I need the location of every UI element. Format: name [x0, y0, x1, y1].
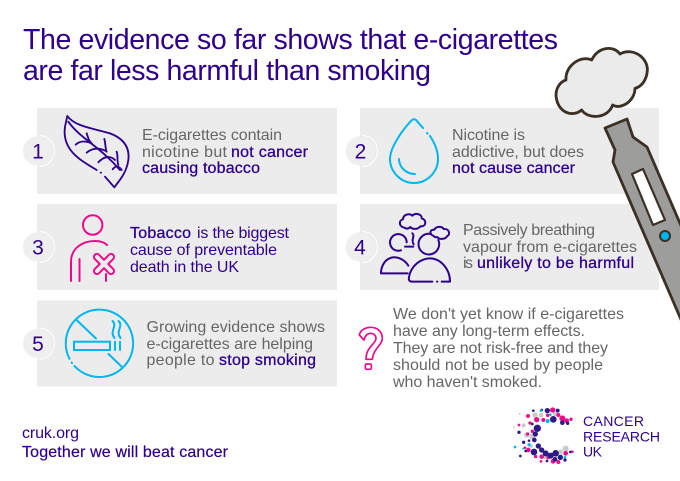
text: panel 5: stop smoking [219, 352, 316, 369]
caveat text: should not be used by people [393, 357, 603, 374]
text: panel 4: vapour from e-cigarettes [463, 239, 637, 256]
logo wordmark [583, 413, 660, 460]
pen window [632, 169, 665, 225]
number badge 1 [23, 136, 54, 166]
text: panel 2 [452, 127, 584, 177]
number badge 1: 1 [32, 140, 44, 164]
text: panel 2: Nicotine is [452, 127, 525, 144]
text: panel 1: nicotine but [142, 144, 228, 161]
icon: people breathing vapour [381, 214, 450, 282]
number badge 2: 2 [355, 140, 366, 164]
number badge 4 [346, 232, 377, 262]
panel 5: stop smoking [23, 300, 337, 386]
panel 2: nicotine [346, 108, 659, 194]
text: panel 2: addictive, but does [452, 144, 584, 161]
text: panel 3: death in the UK [130, 259, 239, 276]
text: panel 3: is the biggest [197, 225, 290, 242]
text: panel 5: e-cigarettes are helping [146, 336, 313, 353]
caveat text [392, 306, 624, 391]
number badge 3: 3 [32, 236, 44, 260]
text: panel 1 [142, 127, 309, 177]
text: panel 2: not cause cancer [452, 160, 576, 177]
text: panel 3 [130, 225, 290, 276]
icon: nicotine drop [390, 119, 438, 183]
icon: person with cross [71, 215, 122, 282]
icon: leaf [65, 116, 129, 187]
text: panel 5: Growing evidence shows [146, 319, 325, 336]
number badge 5 [23, 328, 54, 359]
text: panel 1: E-cigarettes contain [142, 127, 282, 144]
pen button [660, 231, 670, 241]
logo wordmark: UK [583, 444, 603, 460]
e-cigarette illustration [556, 48, 680, 352]
vapour cloud [556, 48, 647, 116]
footer text: Together we will beat cancer [22, 444, 229, 461]
logo dots [513, 407, 574, 464]
panel 1: tobacco [23, 108, 337, 194]
text: panel 1: not cancer [231, 144, 309, 161]
number badge 3 [23, 232, 54, 262]
title: The evidence so far shows that e-cigarettes [23, 24, 558, 56]
icon: no smoking [66, 310, 133, 377]
caveat text: have any long-term effects. [393, 323, 585, 340]
logo wordmark: RESEARCH [583, 428, 660, 444]
title: are far less harmful than smoking [23, 55, 431, 87]
panel 3: preventable death [23, 204, 337, 290]
text: panel 1: causing tobacco [142, 160, 260, 177]
text: panel 3: cause of preventable [130, 242, 277, 259]
text: panel 3: Tobacco [130, 225, 191, 242]
icon: question mark [359, 327, 382, 369]
text: panel 4: unlikely to be harmful [477, 255, 634, 272]
text: panel 5: people to [146, 352, 215, 369]
caveat text: They are not risk-free and they [393, 340, 608, 357]
number badge 5: 5 [32, 333, 44, 356]
text: panel 5 [146, 319, 325, 369]
text: panel 4: is [463, 255, 473, 272]
caveat text: We don't yet know if e-cigarettes [393, 306, 624, 323]
footer text: cruk.org [22, 425, 79, 442]
caveat text: who haven't smoked. [392, 374, 542, 391]
logo: Cancer Research UK [513, 407, 660, 464]
logo wordmark: CANCER [583, 413, 644, 429]
title [23, 24, 558, 87]
number badge 2 [346, 136, 377, 166]
footer text [22, 425, 229, 461]
number badge 4: 4 [354, 236, 366, 260]
pen body [605, 119, 680, 352]
text: panel 4: Passively breathing [463, 222, 595, 239]
panel 4: passive vapour [346, 204, 659, 290]
text: panel 4 [463, 222, 637, 272]
